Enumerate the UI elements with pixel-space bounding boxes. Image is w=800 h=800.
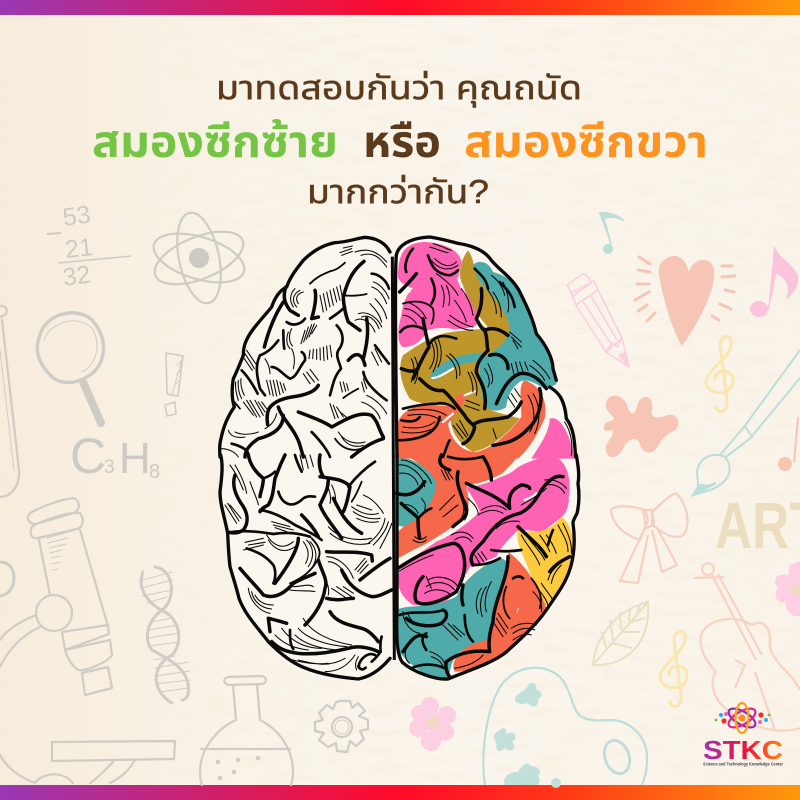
right hemisphere upper line work (395, 237, 576, 457)
doodle: paint brush (693, 350, 800, 495)
doodle: chemical formula (70, 428, 160, 484)
doodle: magnifying glass (37, 313, 104, 423)
logo atom icon (715, 703, 770, 733)
logo wordmark: STKC (703, 735, 783, 765)
doodle: pink flower lower (409, 697, 456, 751)
doodle: pink music note (750, 247, 797, 317)
doodle: chemical formula: 8 (149, 461, 160, 483)
doodle: bow (611, 494, 688, 583)
doodle: pink flower right (775, 562, 800, 616)
doodle: teal music note (599, 213, 624, 254)
title line two: left brain: สมองซีกซ้าย (92, 118, 338, 167)
right hemisphere colour patches (395, 240, 583, 683)
left hemisphere lower line work (220, 455, 392, 679)
doodle: subtraction sum (47, 200, 131, 292)
doodle: orange music note (778, 417, 798, 471)
doodle: yellow treble clef lower (660, 631, 687, 707)
doodle: atom (148, 209, 250, 307)
doodle: chemical formula: H (119, 434, 151, 483)
doodle: yellow treble clef (706, 336, 733, 412)
title line three: มากกว่ากัน? (307, 173, 489, 210)
title line two: right brain: สมองซีกขวา (464, 118, 708, 167)
right hemisphere lower line work (396, 455, 579, 679)
doodle: paint palette (483, 668, 647, 788)
doodle: paint splat (604, 396, 678, 457)
doodle: heart with rays (635, 256, 735, 346)
doodle: pink pencil (567, 274, 629, 367)
title line two: or: หรือ (363, 118, 441, 167)
doodle: DNA helix (141, 567, 190, 703)
doodle: subtraction sum: 53 (61, 200, 92, 232)
left hemisphere fill (220, 238, 394, 678)
doodle: flask (200, 676, 293, 785)
doodle: chemical formula: 3 (104, 457, 115, 478)
lower patches (395, 455, 575, 680)
brain illustration (220, 237, 583, 683)
doodle: violin (694, 563, 800, 731)
doodle: subtraction sum: 32 (61, 260, 92, 292)
top gradient bar (0, 0, 800, 15)
doodle: microscope (0, 498, 175, 783)
STKC logo (703, 703, 783, 766)
doodle: chemical formula: C (70, 428, 106, 484)
upper patches (398, 242, 575, 459)
doodle: subtraction sum: 21 (64, 233, 94, 264)
doodle: test tube bubble (0, 562, 14, 596)
doodle: leaf (593, 602, 648, 665)
title line one: มาทดสอบกันว่า คุณถนัด (216, 69, 582, 108)
logo tagline: Science and Technology Knowledge Center (703, 762, 783, 766)
doodle: exclamation mark (165, 353, 183, 416)
doodle: gear (315, 701, 368, 752)
doodle: test tube (0, 306, 19, 497)
bottom gradient bar (0, 785, 800, 800)
midline (392, 257, 394, 660)
left hemisphere upper line work (220, 237, 390, 457)
